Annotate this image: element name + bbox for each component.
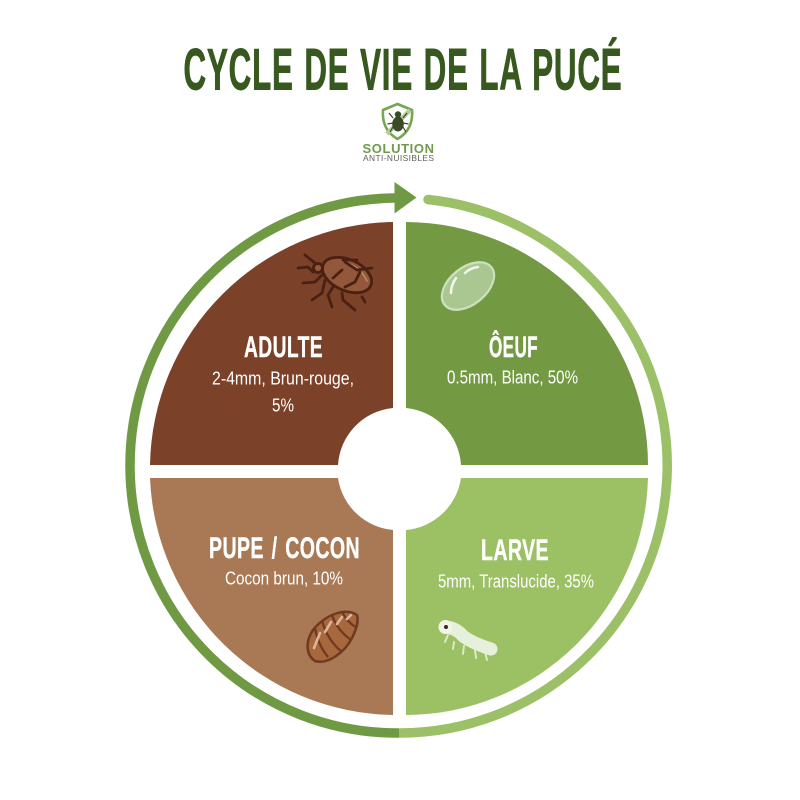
panel: oeuf bbox=[406, 222, 648, 465]
text: pupe details: Cocon brun, 10% bbox=[225, 568, 343, 588]
icon: egg bbox=[433, 253, 503, 319]
heading: oeuf: ÔEUF bbox=[489, 330, 538, 364]
heading: adulte: ADULTE bbox=[244, 331, 323, 364]
cycle arc: light green bbox=[399, 195, 667, 733]
text: adulte details line 1: 2-4mm, Brun-rouge, bbox=[212, 368, 354, 388]
panel: pupe / cocon bbox=[150, 478, 393, 715]
logo: Solution Anti-Nuisibles bbox=[362, 104, 434, 163]
cycle arrow: dark green arc bbox=[130, 182, 416, 733]
icon: adult flea bbox=[298, 250, 377, 310]
text: oeuf details: 0.5mm, Blanc, 50% bbox=[447, 366, 578, 388]
arrow head bbox=[394, 182, 416, 214]
text: adulte details line 2: 5% bbox=[272, 394, 294, 416]
text: larve details: 5mm, Translucide, 35% bbox=[438, 570, 594, 592]
panel: larve bbox=[406, 478, 648, 715]
icon: larva bbox=[438, 620, 491, 660]
heading: larve: LARVE bbox=[481, 534, 549, 567]
icon: cocoon bbox=[308, 612, 358, 662]
panel: adulte bbox=[150, 222, 393, 465]
icon: shield with crossed bug bbox=[383, 104, 412, 139]
logo wordmark: SOLUTION bbox=[362, 141, 434, 156]
logo tagline: ANTI-NUISIBLES bbox=[363, 153, 434, 163]
heading: pupe / cocon: PUPE / COCON bbox=[209, 532, 360, 565]
